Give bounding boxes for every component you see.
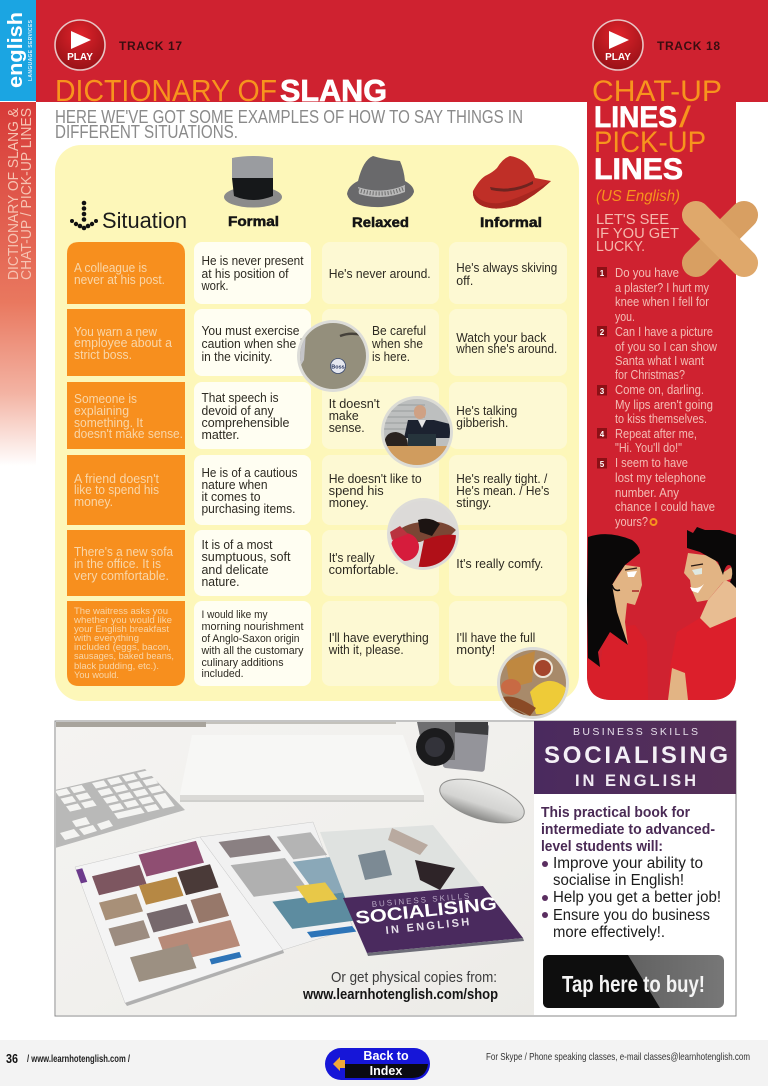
logo tab: LANGUAGE SERVICES	[28, 19, 34, 81]
numbered pick-up lines: to kiss themselves.	[615, 412, 707, 426]
row 6: culinary additions	[202, 657, 284, 669]
panel: book advert	[55, 720, 736, 1016]
row 2: Watch your back	[456, 331, 547, 345]
row 2: in the vicinity.	[202, 350, 272, 364]
title: dictionary of slang: SLANG	[280, 73, 387, 108]
row 3: devoid of any	[202, 404, 274, 418]
row 4: purchasing items.	[202, 502, 296, 516]
numbered pick-up lines	[597, 266, 718, 529]
numbered pick-up lines: Repeat after me,	[615, 427, 697, 441]
row 6: sausages, baked beans,	[74, 651, 174, 662]
logo tab	[0, 0, 36, 101]
numbered pick-up lines: of you so I can show	[615, 340, 718, 354]
row 1: A colleague is	[74, 261, 147, 275]
logo tab: english	[5, 12, 27, 88]
numbered pick-up lines: knee when I fell for	[615, 295, 709, 309]
row 4: spend his	[329, 484, 384, 498]
numbered pick-up lines: Come on, darling.	[615, 383, 704, 397]
play button: track 18: PLAY	[605, 52, 631, 63]
numbered pick-up lines: 5	[600, 460, 605, 469]
row 3: make	[329, 409, 359, 423]
book description: Help you get a better job!	[553, 889, 721, 906]
row 4: money.	[74, 495, 113, 509]
couple illustration	[587, 527, 736, 700]
book description: Ensure you do business	[553, 907, 710, 924]
woman figure	[587, 534, 648, 700]
row 5: and delicate	[202, 563, 269, 577]
numbered pick-up lines: 1	[600, 269, 605, 278]
numbered pick-up lines: Can I have a picture	[615, 325, 713, 339]
numbered pick-up lines: yours?	[615, 515, 648, 529]
title: chat-up lines	[592, 75, 722, 186]
intro: let's see: LUCKY.	[596, 238, 645, 255]
numbered pick-up lines: My lips aren't going	[615, 398, 713, 412]
row 6: I would like my	[202, 609, 268, 621]
book title banner: SOCIALISING	[544, 742, 728, 769]
row 6: I'll have the full	[456, 631, 535, 645]
shop text: www.learnhotenglish.com/shop	[302, 987, 498, 1003]
row 3: It doesn't	[329, 397, 380, 411]
advert photo	[55, 720, 534, 1015]
track 17 label: TRACK 17	[119, 39, 182, 53]
row 1: work.	[201, 279, 228, 293]
row 6: black pudding, etc.).	[74, 661, 159, 672]
row 6: You would.	[74, 670, 119, 681]
row 1: never at his post.	[74, 273, 165, 287]
row 2: when she	[371, 337, 423, 351]
side tab: section name: CHAT-UP / PICK-UP LINES	[18, 108, 35, 280]
book description: socialise in English!	[553, 872, 684, 889]
row 4: money.	[329, 496, 369, 510]
row 4: He's really tight. /	[456, 472, 548, 486]
panel: slang table	[55, 145, 579, 719]
row 2: You must exercise	[202, 324, 300, 338]
row 2: is here.	[372, 350, 410, 364]
row 6: included.	[202, 668, 244, 680]
row 6: whether you would like	[73, 615, 172, 626]
numbered pick-up lines: Santa what I want	[615, 354, 704, 368]
title: dictionary of slang: DICTIONARY OF	[55, 73, 277, 108]
side tab: section name: DICTIONARY OF SLANG &	[5, 108, 22, 280]
book cover: BUSINESS SKILLS	[371, 891, 472, 909]
row 5: It's really comfy.	[456, 557, 543, 571]
row 1: He's always skiving	[456, 261, 557, 275]
shop text	[302, 970, 498, 1003]
shop text: Or get physical copies from:	[331, 970, 497, 986]
row 2: You warn a new	[74, 325, 158, 339]
row 3: comprehensible	[202, 416, 290, 430]
heading: situation: Situation	[102, 208, 187, 233]
numbered pick-up lines: you.	[615, 310, 635, 324]
book cover	[320, 825, 524, 956]
row 2: when she's around.	[455, 342, 557, 356]
title: chat-up lines: /	[679, 101, 692, 134]
photo circle: boring meeting	[381, 396, 454, 470]
title: chat-up lines: LINES	[594, 101, 677, 134]
row 5: very comfortable.	[74, 569, 169, 583]
row 6: your English breakfast	[74, 624, 169, 635]
footer: 36	[6, 1051, 18, 1066]
book title banner: BUSINESS SKILLS	[573, 726, 698, 738]
row 3	[67, 382, 567, 449]
intro text: DIFFERENT SITUATIONS.	[55, 122, 238, 142]
button: tap here to buy: Tap here to buy!	[562, 971, 705, 997]
photo circle: full english breakfast	[497, 647, 569, 719]
book title banner: IN ENGLISH	[575, 772, 696, 790]
numbered pick-up lines: 3	[600, 387, 605, 396]
row 3: Someone is	[74, 392, 137, 406]
row 4: like to spend his	[74, 483, 159, 497]
heading: informal: Informal	[480, 214, 542, 230]
subtitle: us english: (US English)	[596, 188, 680, 205]
row 6: The waitress asks you	[74, 606, 168, 617]
row 3: sense.	[329, 421, 365, 435]
row 3: That speech is	[202, 391, 278, 405]
row 2: Be careful	[372, 324, 426, 338]
book description: This practical book for	[541, 804, 690, 821]
button: back to index: Back to	[363, 1049, 409, 1063]
row 6: with all the customary	[201, 645, 304, 657]
intro text	[55, 107, 523, 142]
title: chat-up lines: PICK-UP	[594, 126, 706, 159]
open magazine	[75, 822, 388, 1006]
keyboard	[55, 769, 185, 848]
row 5: in the office. It is	[74, 557, 161, 571]
row 3: doesn't make sense.	[74, 427, 183, 441]
row 1: He is never present	[202, 254, 304, 268]
intro: let's see: IF YOU GET	[596, 225, 679, 242]
intro: let's see: LET'S SEE	[596, 211, 669, 228]
row 6: included (eggs, bacon,	[74, 642, 171, 653]
side tab: section name	[0, 102, 36, 466]
numbered pick-up lines: lost my telephone	[615, 471, 706, 485]
row 6: I'll have everything	[329, 631, 429, 645]
row 3: explaining	[74, 404, 129, 418]
row 4: He's mean. / He's	[456, 484, 549, 498]
play button: track 18	[593, 20, 643, 70]
photo circle: boss badge: Boss	[331, 364, 345, 370]
footer: / www.learnhotenglish.com /	[27, 1054, 130, 1065]
man figure	[668, 527, 736, 700]
book title banner	[534, 721, 736, 794]
numbered pick-up lines: "Hi. You'll do!"	[615, 441, 682, 455]
row 4: A friend doesn't	[74, 472, 160, 486]
icon: relaxed hat	[347, 156, 414, 207]
row 1: off.	[456, 274, 473, 288]
numbered pick-up lines: number. Any	[615, 486, 680, 500]
photo circle: boss badge	[297, 320, 369, 392]
row 1: He's never around.	[329, 267, 431, 281]
button: back to index: Index	[370, 1064, 402, 1078]
numbered pick-up lines: a plaster? I hurt my	[615, 281, 710, 295]
row 6: morning nourishment	[202, 621, 304, 633]
book description: Improve your ability to	[553, 855, 703, 872]
row 5: comfortable.	[329, 563, 399, 577]
row 1	[67, 242, 567, 304]
book description: more effectively!.	[553, 924, 665, 941]
row 3: matter.	[202, 428, 240, 442]
row 4: He is of a cautious	[202, 466, 298, 480]
play button: track 17	[55, 20, 105, 70]
row 5: It is of a most	[202, 538, 273, 552]
row 5: There's a new sofa	[74, 545, 173, 559]
numbered pick-up lines: 4	[600, 430, 605, 439]
intro: let's see	[596, 211, 679, 255]
icon: crossed plasters	[676, 195, 764, 283]
button: back to index	[325, 1048, 430, 1080]
row 3: gibberish.	[456, 416, 508, 430]
row 4: stingy.	[456, 496, 491, 510]
numbered pick-up lines: chance I could have	[615, 500, 715, 514]
book cover: SOCIALISING	[354, 893, 498, 928]
icon: situation arrow	[70, 201, 98, 230]
row 3: something. It	[74, 416, 143, 430]
footer	[0, 1040, 768, 1086]
row 4	[67, 455, 567, 525]
icon: formal top hat	[224, 156, 282, 208]
row 4: nature when	[202, 478, 268, 492]
book cover: IN ENGLISH	[385, 916, 470, 937]
row 5: It's really	[329, 551, 375, 565]
laptop	[180, 794, 424, 802]
book description: intermediate to advanced-	[541, 821, 715, 838]
photo circle: woman on red sofa	[387, 498, 459, 570]
row 2: employee about a	[74, 336, 172, 350]
numbered pick-up lines: for Christmas?	[615, 368, 685, 382]
track 18 label: TRACK 18	[657, 39, 720, 53]
row 5	[67, 530, 567, 596]
heading: formal: Formal	[228, 213, 279, 229]
camera	[416, 720, 489, 772]
panel: chat-up lines	[587, 20, 764, 700]
top red band	[36, 0, 768, 102]
button: tap here to buy	[543, 955, 724, 1008]
numbered pick-up lines: Do you have	[615, 266, 679, 280]
row 6: with it, please.	[328, 643, 404, 657]
numbered pick-up lines: I seem to have	[615, 456, 688, 470]
row 6	[67, 601, 567, 686]
intro text: HERE WE'VE GOT SOME EXAMPLES OF HOW TO SAY THINGS IN	[55, 107, 523, 127]
book description: level students will:	[541, 838, 663, 855]
book description	[541, 804, 721, 941]
row 6: of Anglo-Saxon origin	[202, 633, 300, 645]
row 2: strict boss.	[74, 348, 132, 362]
row 4: He doesn't like to	[329, 472, 422, 486]
heading: relaxed: Relaxed	[352, 214, 409, 230]
row 6: monty!	[456, 643, 495, 657]
row 2: caution when she is	[202, 337, 308, 351]
row 1: at his position of	[202, 267, 289, 281]
numbered pick-up lines: 2	[600, 328, 605, 337]
title: chat-up lines: LINES	[594, 153, 683, 186]
row 5: nature.	[202, 575, 240, 589]
mouse	[439, 778, 525, 824]
title: chat-up lines: CHAT-UP	[592, 75, 722, 108]
icon: informal cowboy hat	[473, 156, 551, 209]
row 5: sumptuous, soft	[202, 550, 291, 564]
row 6: with everything	[73, 633, 139, 644]
row 2	[67, 309, 567, 376]
play button: track 17: PLAY	[67, 52, 93, 63]
row 3: He's talking	[456, 404, 517, 418]
row 4: it comes to	[202, 490, 261, 504]
